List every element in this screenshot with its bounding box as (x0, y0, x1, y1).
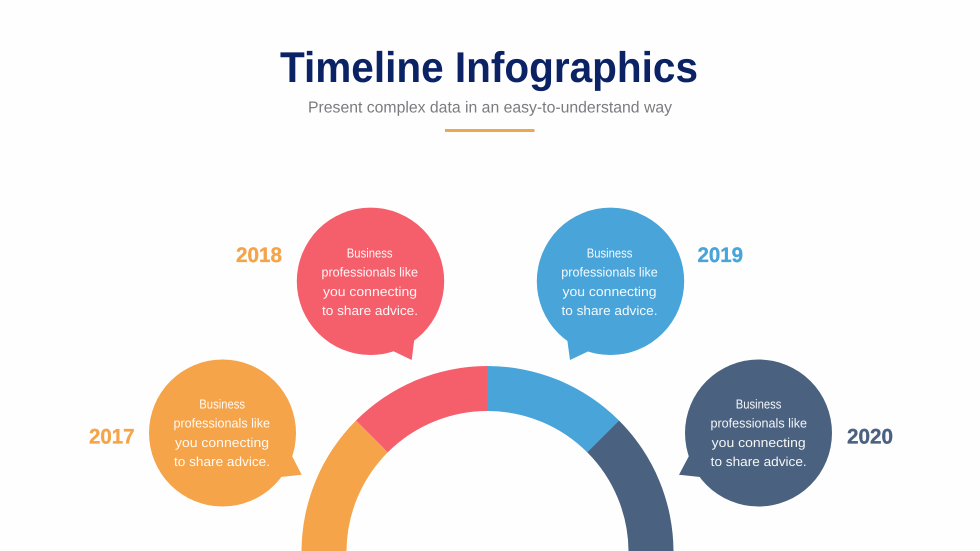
speech bubble: 2018: professionals like (322, 265, 418, 280)
ring segment: 2018 (356, 366, 488, 452)
speech bubble: 2020 (679, 360, 832, 506)
ring segment: 2017 (302, 420, 388, 551)
speech bubble: 2018: Business (347, 245, 393, 260)
speech bubble: 2019: Business (587, 245, 633, 260)
accent rule under subtitle (445, 129, 534, 132)
speech bubble: 2017: Business (199, 396, 245, 411)
speech bubble: 2018: to share advice. (322, 303, 418, 318)
speech bubble: 2018: you connecting (323, 284, 417, 299)
ring segment: 2020 (587, 420, 674, 551)
year label: 2020: 2020 (847, 426, 893, 448)
year label: 2019: 2019 (698, 244, 743, 267)
speech bubble: 2017: to share advice. (174, 454, 270, 469)
speech bubble: 2019: professionals like (561, 265, 658, 280)
speech bubble: 2017: you connecting (175, 435, 269, 450)
speech bubble: 2019: to share advice. (562, 303, 658, 318)
speech bubble: 2019: you connecting (562, 284, 656, 299)
speech bubble: 2020: you connecting (712, 435, 806, 450)
year label: 2018: 2018 (236, 244, 282, 267)
semicircular timeline ring (302, 366, 674, 551)
speech bubble: 2020: to share advice. (711, 454, 807, 469)
speech bubble: 2020: Business (736, 396, 782, 411)
speech bubble: 2017: professionals like (174, 416, 270, 431)
speech bubble: 2019 (537, 208, 684, 360)
speech bubble: 2017 (149, 360, 302, 506)
year label: 2017: 2017 (89, 426, 134, 448)
speech bubble: 2018 (297, 208, 444, 360)
subtitle: Present complex data in an easy-to-understand way (308, 100, 672, 116)
title: Timeline Infographics (280, 44, 698, 92)
speech bubble: 2020: professionals like (710, 416, 807, 431)
ring segment: 2019 (488, 366, 619, 452)
